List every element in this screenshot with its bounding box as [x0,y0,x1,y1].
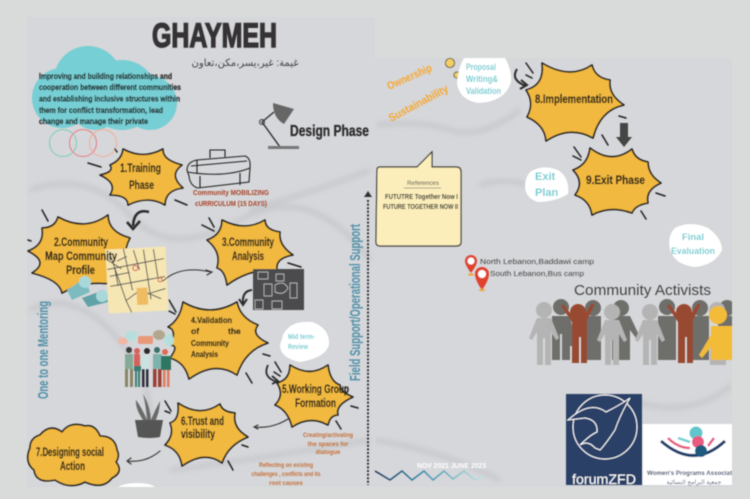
step 8: implementation [526,63,626,145]
white bubble: proposal: Proposal [466,62,496,72]
logo: forumZFD [566,394,642,487]
teal cloud with objective text: Improving and building relationships and [39,72,172,81]
step 1: training phase: Phase [129,180,154,192]
text: dates: NOV 2021 JUNE 2023 [417,463,486,470]
step 4: validation: of [191,326,199,336]
note: creating spaces: Creating/activating [303,433,353,439]
icon: location pins [465,255,489,291]
step 7: designing social action [28,424,119,486]
title: GHAYMEH [152,17,277,55]
white bubble clipped at bottom [118,483,155,487]
step 9: exit phase [573,147,665,219]
arrow: step 4 to 5 [266,365,278,384]
group of community activist figures [529,299,735,365]
image: city map [105,246,169,314]
callout: references: FUTUTRE Together Now I [385,194,458,201]
step 2 text: 2.Community [54,237,108,249]
step 4: validation [168,302,270,383]
text: sustainability: Sustainability [387,83,451,125]
heading: community activists: Community Activists [574,282,711,299]
vertical label: one to one mentoring: One to one Mentoring [35,301,52,399]
icon: desk lamp [260,103,299,149]
logo: women's programs association: جمعية البرامج النسائية [666,479,722,486]
heading: design phase: Design Phase [290,123,369,140]
note: reflecting on challenges: Reflecting on existing [259,463,313,469]
logo: women's programs association: Women's Programs Associat [647,471,732,477]
callout: references: References [407,181,439,187]
arrow: step 3 to 4 [239,290,252,305]
arrow: to step 8 [515,63,533,89]
illustration: people talking [118,330,174,387]
decorative zigzag [375,471,484,480]
teal cloud with objective text: them for conflict transformation, lead [39,106,163,115]
white bubble: proposal [457,58,511,103]
step 9: exit phase: 9.Exit Phase [586,175,645,187]
note: reflecting on challenges: root causes [269,481,303,487]
step 7: designing social action: 7.Designing social [36,447,104,459]
arrow: step 2 to 3 [163,270,212,281]
white bubble: mid term review [280,322,329,362]
step 5: working group: 5.Working Group [282,384,349,396]
step 2 text [45,237,117,277]
step 1: training phase [88,149,187,205]
teal cloud with objective text: change and manage their private [39,117,148,126]
arabic subtitle: غيمة: غير،يسر،مكن،تعاون [192,58,298,69]
icon: potted plant [135,394,163,438]
text: curriculum [193,190,270,208]
white bubble: final evaluation [669,224,722,267]
text: curriculum: Community MOBILIZING [193,190,270,197]
teal cloud with objective text [32,46,181,130]
panel: left marble page [30,168,370,472]
arrow: step 5 to 6 [254,419,288,429]
white bubble: final evaluation: Evaluation [671,246,715,257]
vertical label: field support: Field Support/Operational Support [347,224,364,381]
teal cloud with objective text: cooperation between different communities [39,83,181,92]
note: reflecting on challenges: challenges , conflicts and its [252,472,321,478]
white bubble: exit plan: Plan [535,187,559,199]
step 5: working group [274,362,358,429]
white bubble: exit plan: Exit [535,171,556,183]
arrow: down to step 9 [616,123,632,147]
step 6: trust and visibility [165,403,248,466]
text: locations: North Lebanon,Baddawi camp [480,257,594,266]
text: locations: South Lebanon,Bus camp [490,269,584,278]
note: creating spaces: the spaces for [308,442,349,448]
text: locations [480,257,594,278]
logo: forumZFD: forumZFD [572,472,636,487]
step 2 text: Profile [66,265,95,277]
step 7: designing social action: Action [60,461,85,473]
white bubble: proposal: Validation [466,86,501,96]
step 3: community analysis [202,218,301,285]
step 1: training phase: 1.Training [120,163,161,175]
note: creating spaces: dialogue [316,450,341,456]
white bubble: mid term review: Review [288,344,308,351]
step 2: community map [28,210,130,293]
panel: right marble page [376,109,732,482]
arrow: step 1 to 2 [127,211,149,229]
white bubble: mid term review: Mid term- [288,334,316,341]
thought dots [446,58,460,78]
note: creating spaces [303,433,353,456]
step 6: trust and visibility: 6.Trust and [181,416,224,428]
step 4: validation: the [228,326,241,336]
icon: binoculars [67,276,108,307]
white bubble: exit plan [525,167,568,202]
step 3: community analysis: Analysis [232,251,264,263]
note: reflecting on challenges [252,463,321,487]
arrow: dotted vertical [364,191,372,485]
text: curriculum: cURRICULUM (15 DAYS) [195,201,267,208]
step 4: validation: Community [191,338,229,348]
text: ownership: Ownership [385,62,434,93]
overlapping circles [50,130,116,156]
marks by map [169,300,176,314]
step 3: community analysis: 3.Community [222,237,274,249]
step 4: validation: 4.Validation [191,315,232,325]
arrow: step 6 to 7 [127,451,160,464]
step 6: trust and visibility: visibility [181,429,215,441]
teal cloud with objective text: and establishing inclusive structures within [39,94,180,104]
callout: references [376,152,461,246]
white bubble: proposal: Writing& [466,74,498,84]
icon: briefcase [187,150,250,188]
logo: women's programs association [643,424,732,486]
white bubble: final evaluation: Final [682,232,704,243]
image: chalkboard [253,269,304,310]
step 8: implementation: 8.Implementation [535,94,613,106]
callout: references: FUTURE TOGETHER NOW II [383,204,458,211]
step 5: working group: Formation [295,398,336,410]
step 4: validation: Analysis [191,349,218,359]
step 2 text: Map Community [45,251,117,263]
